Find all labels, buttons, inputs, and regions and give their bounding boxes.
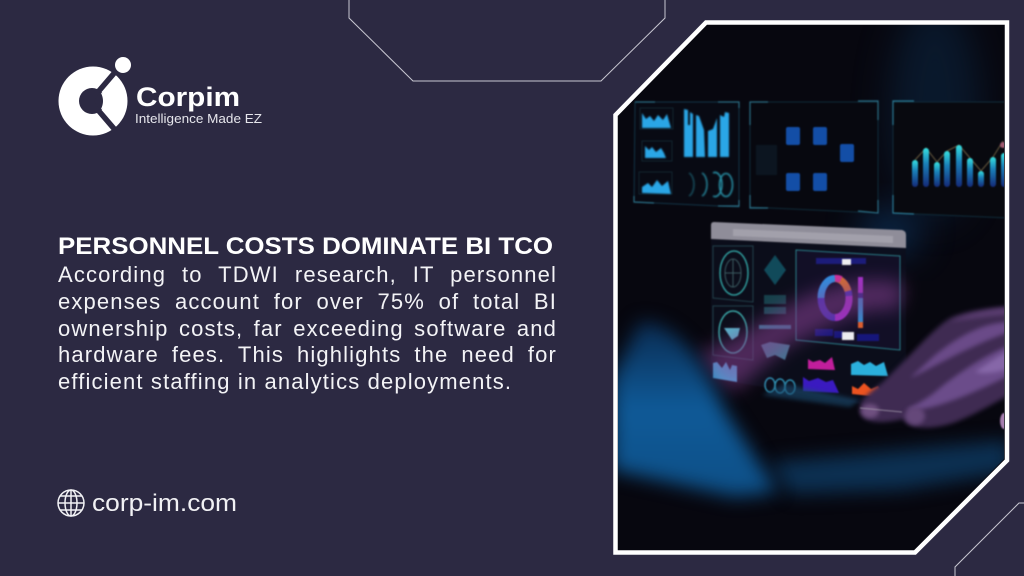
window: middle column bbox=[759, 255, 791, 360]
purple light haze over window bbox=[700, 280, 905, 392]
body text block: According to TDWI research, IT personnel bbox=[58, 262, 557, 287]
decorative outline: bottom right corner bbox=[955, 503, 1024, 576]
keyboard glow bbox=[770, 440, 1010, 494]
website address: corp-im.com bbox=[92, 490, 237, 517]
floating browser window bbox=[711, 222, 906, 412]
dashboard panel: area charts bbox=[634, 102, 739, 207]
body text block: ownership costs, far exceeding software and bbox=[58, 316, 557, 341]
decorative outline: top hexagon bbox=[349, 0, 665, 81]
photo: analyst using holographic dashboard bbox=[618, 25, 1004, 550]
logo mark bbox=[58, 57, 131, 136]
body text block: hardware fees. This highlights the need for bbox=[58, 342, 557, 367]
logo tagline: Intelligence Made EZ bbox=[135, 112, 262, 126]
heading: PERSONNEL COSTS DOMINATE BI TCO bbox=[58, 233, 553, 260]
window: mini area charts bbox=[713, 357, 889, 398]
blurred sleeve in foreground bbox=[612, 322, 778, 497]
logo wordmark: Corpim bbox=[136, 82, 240, 112]
logo: Corpim bbox=[58, 57, 262, 136]
icon: globe bbox=[58, 490, 84, 516]
window: donut chart panel bbox=[796, 250, 900, 350]
body text block bbox=[58, 262, 557, 394]
dashboard panel: blue squares bbox=[750, 101, 878, 213]
hand on keyboard bbox=[860, 306, 1010, 429]
window: globe and map gauges bbox=[713, 246, 753, 360]
dashboard panel: bar chart bbox=[893, 101, 1010, 218]
body text block: expenses account for over 75% of total BI bbox=[58, 289, 557, 314]
body text block: efficient staffing in analytics deployments. bbox=[58, 369, 512, 394]
photo frame bbox=[616, 22, 1007, 552]
